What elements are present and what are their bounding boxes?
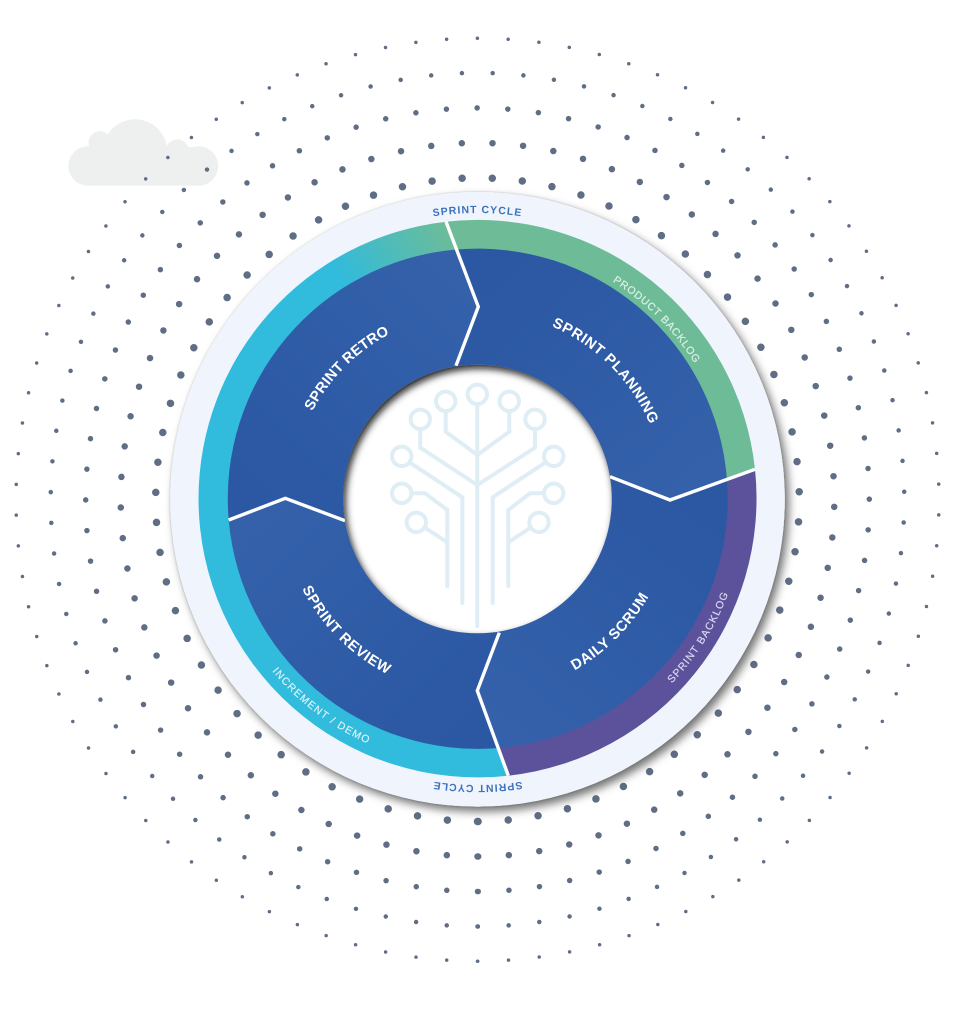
ring segment: increment / demo: [198, 222, 508, 777]
segment: sprint review: [229, 498, 499, 749]
panel: outer coloured ring: [198, 220, 757, 777]
label: sprint cycle top: SPRINT CYCLE: [433, 206, 522, 216]
label: product backlog: PRODUCT BACKLOG: [613, 276, 700, 362]
panel: blue segments: [228, 249, 728, 749]
arrow dividers between segments: [229, 222, 755, 776]
segment: daily scrum: [477, 477, 728, 748]
outer disk: [170, 192, 785, 807]
label: increment / demo: INCREMENT / DEMO: [272, 667, 370, 742]
centre hole: [339, 360, 621, 644]
ring segment: product backlog: [446, 220, 755, 500]
label: sprint cycle bottom: SPRINT CYCLE: [434, 782, 522, 792]
ring segment: sprint backlog: [477, 469, 757, 776]
label: sprint review: SPRINT REVIEW: [303, 586, 392, 673]
label: sprint planning: SPRINT PLANNING: [553, 318, 658, 423]
label: sprint backlog: SPRINT BACKLOG: [668, 592, 728, 682]
icon: cloud: [68, 119, 218, 186]
label: daily scrum: DAILY SCRUM: [570, 592, 648, 670]
segment: sprint retro: [228, 250, 478, 521]
segment: sprint planning: [456, 249, 727, 500]
label: sprint retro: SPRINT RETRO: [304, 327, 388, 410]
icon: circuit tree: [392, 385, 563, 626]
